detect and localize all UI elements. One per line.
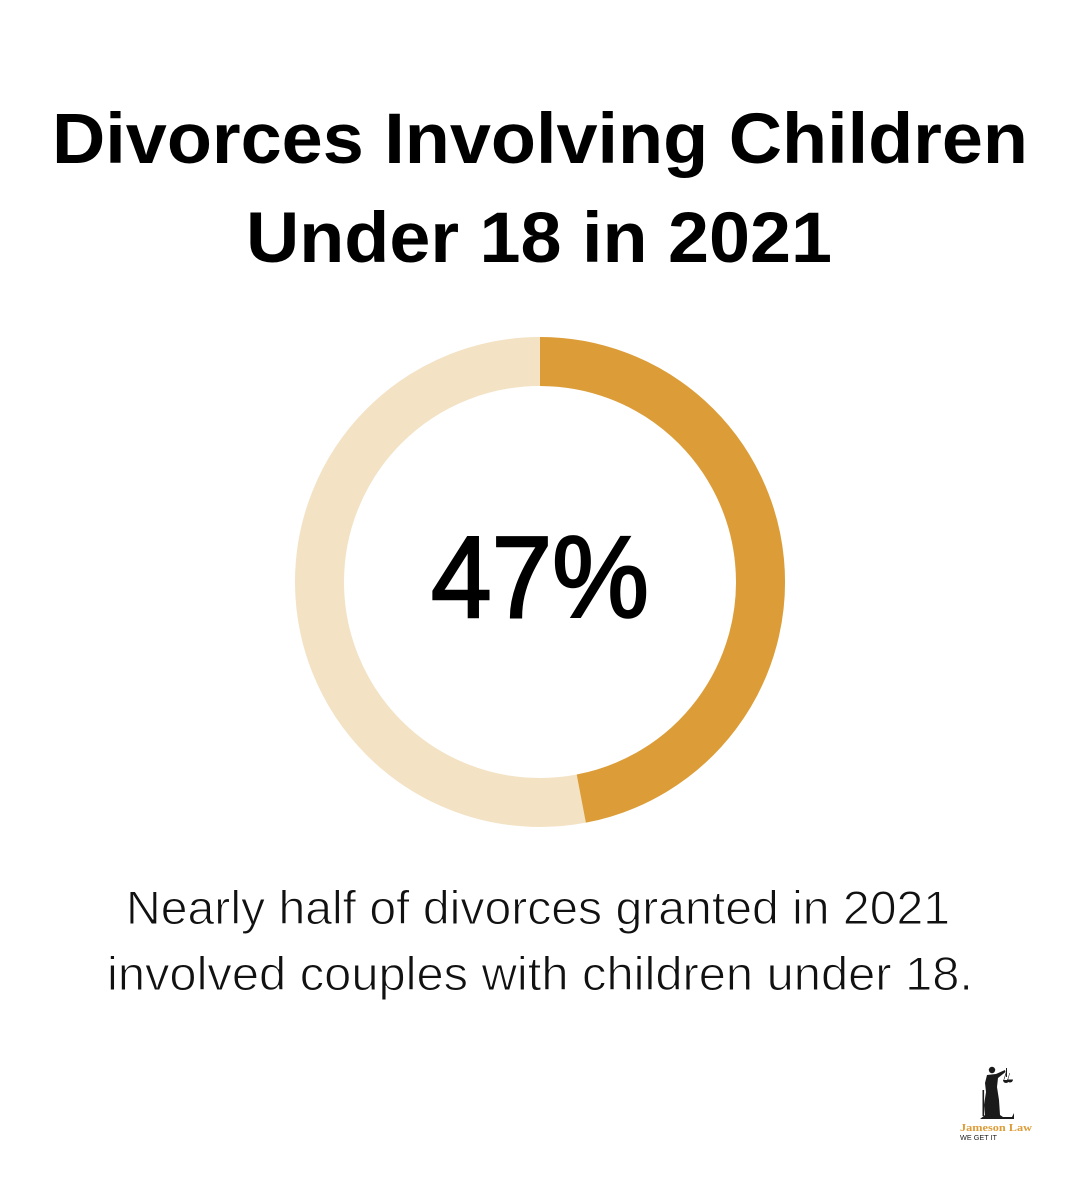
description text: Nearly half of divorces granted in 2021 bbox=[126, 881, 950, 934]
description text bbox=[107, 881, 973, 1000]
title bbox=[52, 100, 1028, 278]
donut chart: 47% bbox=[320, 362, 761, 802]
donut percentage: 47% bbox=[431, 512, 649, 642]
donut value arc bbox=[540, 362, 761, 799]
logo tagline: WE GET IT bbox=[960, 1135, 998, 1142]
logo wordmark: Jameson Law bbox=[960, 1123, 1032, 1134]
title: Under 18 in 2021 bbox=[246, 199, 832, 278]
icon: lady justice bbox=[980, 1067, 1014, 1119]
donut track bbox=[320, 362, 760, 802]
title: Divorces Involving Children bbox=[52, 100, 1028, 179]
description text: involved couples with children under 18. bbox=[107, 947, 973, 1000]
logo: Jameson Law bbox=[960, 1067, 1032, 1142]
